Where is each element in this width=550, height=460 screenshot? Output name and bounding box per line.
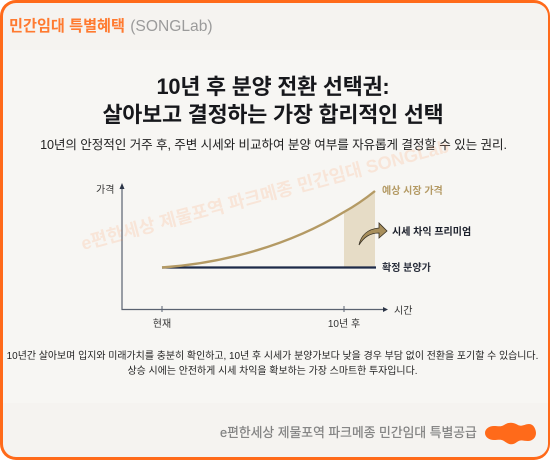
series label: market price: 예상 시장 가격 xyxy=(382,184,443,197)
title: 살아보고 결정하는 가장 합리적인 선택 xyxy=(102,102,444,127)
footer label: e편한세상 제물포역 파크메종 민간임대 특별공급 xyxy=(220,425,477,440)
fixed sale price line xyxy=(162,266,376,269)
axis label: time: 시간 xyxy=(394,305,412,317)
callout: premium: 시세 차익 프리미엄 xyxy=(392,225,471,238)
premium shaded area xyxy=(344,191,375,267)
description text xyxy=(7,350,538,377)
title xyxy=(102,74,444,127)
header label: 민간임대 특별혜택 (SONGLab) xyxy=(9,18,213,35)
axis label: price: 가격 xyxy=(96,183,114,196)
series label: fixed price: 확정 분양가 xyxy=(382,261,431,274)
axes xyxy=(122,188,384,312)
content panel xyxy=(3,50,548,403)
market price curve xyxy=(162,191,375,268)
description text: 10년간 살아보며 입지와 미래가치를 충분히 확인하고, 10년 후 시세가 분양가보다 낮을 경우 부담 없이 전환을 포기할 수 있습니다. xyxy=(7,351,538,362)
footer orange blob xyxy=(485,422,536,444)
axis arrowheads xyxy=(120,183,388,312)
tick label: 10 years later: 10년 후 xyxy=(328,318,360,330)
subtitle: 10년의 안정적인 거주 후, 주변 시세와 비교하여 분양 여부를 자유롭게 결정할 수 있는 권리. xyxy=(40,138,507,152)
tick label: now: 현재 xyxy=(153,318,171,330)
premium arrow icon xyxy=(359,223,387,245)
description text: 상승 시에는 안전하게 시세 차익을 확보하는 가장 스마트한 투자입니다. xyxy=(128,366,417,377)
watermark: e편한세상 제물포역 파크메종 민간임대 SONGLab xyxy=(79,136,451,254)
title: 10년 후 분양 전환 선택권: xyxy=(156,74,390,99)
